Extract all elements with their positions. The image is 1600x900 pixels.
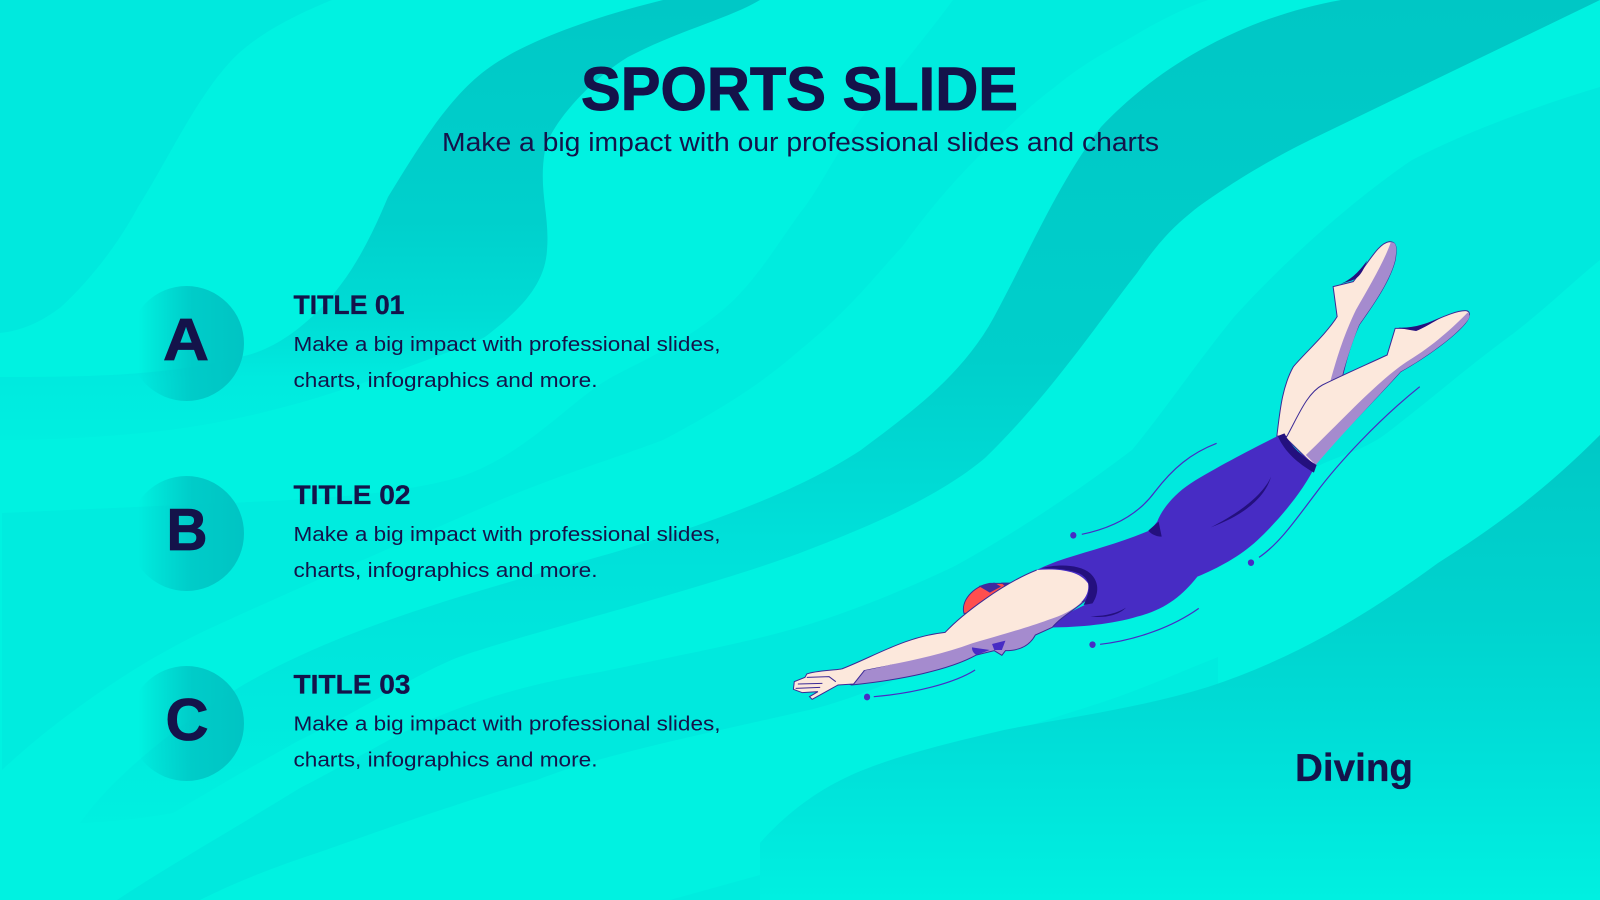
item A xyxy=(129,286,720,401)
swim cap xyxy=(963,583,1010,613)
icon: circle C: C xyxy=(166,687,208,753)
motion lines xyxy=(864,387,1420,700)
item B xyxy=(129,476,720,591)
text block: title 01 xyxy=(294,290,720,392)
text block: title 01: Make a big impact with professional slides, xyxy=(294,334,720,356)
text block: title 03: TITLE 03 xyxy=(294,670,410,700)
arms and hands xyxy=(793,569,1088,699)
title: SPORTS SLIDE xyxy=(581,55,1018,123)
icon: circle B: B xyxy=(166,497,208,563)
icon: circle B xyxy=(129,476,244,591)
illustration: diver xyxy=(793,242,1470,700)
front leg xyxy=(1284,311,1470,465)
text block: title 03 xyxy=(294,670,720,772)
text block: title 02: charts, infographics and more. xyxy=(294,560,598,582)
icon: circle C xyxy=(129,666,244,781)
swimsuit xyxy=(1037,433,1317,628)
text block: title 02 xyxy=(294,480,720,582)
icon: circle A xyxy=(129,286,244,401)
subtitle: Make a big impact with our professional slides and charts xyxy=(442,129,1159,157)
text block: title 03: charts, infographics and more. xyxy=(294,750,598,772)
back leg xyxy=(1277,242,1396,437)
text block: title 02: TITLE 02 xyxy=(294,480,410,510)
item C xyxy=(129,666,720,781)
text block: title 01: charts, infographics and more. xyxy=(294,370,598,392)
text block: title 03: Make a big impact with professional slides, xyxy=(294,714,720,736)
icon: circle A: A xyxy=(163,307,209,373)
label: Diving: Diving xyxy=(1295,747,1413,790)
text block: title 01: TITLE 01 xyxy=(294,290,404,320)
text block: title 02: Make a big impact with professional slides, xyxy=(294,524,720,546)
